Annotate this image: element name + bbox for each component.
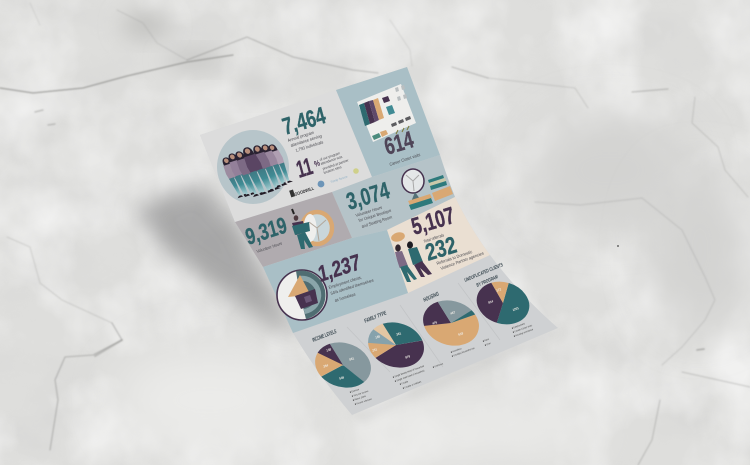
pie values: 618 [458,331,464,337]
pie [428,305,474,341]
text: employment clients: 54% identified themselves [330,277,374,296]
number: 9,319: 9,319 [243,213,290,250]
sheet base [200,67,558,415]
pie values: 185 [375,334,381,340]
pie values: 476 [432,320,438,326]
legend: ■ Above 100% [352,395,366,402]
legend [450,338,492,358]
pie values: 979 [405,354,411,360]
legend: ■ Very low income [351,390,369,398]
pie [371,326,421,364]
pie values: 814 [488,299,494,305]
panel: attendance [200,90,372,222]
legend [349,388,373,406]
chart title: BY PROGRAM [476,273,499,288]
partner logos [289,168,359,197]
text: employment clients [328,274,374,303]
text: annual attendance [287,129,324,153]
chart title: UNDUPLICATED CLIENTS [464,261,504,283]
icon: volunteer with clock ring [292,209,332,249]
pie values: 172 [496,287,502,293]
text: annual attendance: Annual program [287,129,315,143]
legend: ■ Couple [399,380,409,386]
legend: ■ Couple w/ children [402,380,422,390]
pie values: 861 [349,356,355,362]
legend: ■ Income unknown [354,397,373,406]
text: total referrals: Total referrals [423,232,445,244]
paper shadow [132,182,560,422]
text: employment clients: as homeless [334,291,356,303]
icon: house in circle [277,270,327,320]
number: 232: 232 [422,231,459,266]
chart: family type [364,310,444,390]
text: partner sites [319,151,350,175]
text: domestic violence referrals: Violence Partner agencies [440,250,484,271]
number: 11%: % [313,158,321,169]
text: partner sites: location sites [323,165,342,175]
chart title: FAMILY TYPE [364,310,388,325]
text: career closet visits: Career Closet visits [389,152,421,167]
chart: income levels [312,328,373,406]
pie values [323,347,355,381]
chart: housing [423,290,492,358]
text: annual attendance: 1,793 individuals [295,139,324,153]
panel: referrals [387,197,490,293]
pie values: 467 [450,310,456,316]
text: boutique hours: Volunteer Hours [355,205,383,218]
legend: ■ Unstably housed/at risk [451,346,476,358]
text: domestic violence referrals: Referrals to Domestic [436,249,473,266]
pie values: 1201 [512,306,520,312]
paper flyer [200,67,558,415]
text: partner sites: attendance was [320,155,343,166]
number: 7,464: 7,464 [280,102,329,140]
icon: clothing board [357,84,416,142]
pie [317,345,369,385]
pie values: 361 [396,331,402,337]
icon: two people with speech bubble [390,231,432,282]
legend: ■ Unknown [432,362,444,369]
number: 5,107: 5,107 [409,203,457,240]
text: boutique hours: and Seating Room [361,214,393,229]
pie values: 546 [339,375,345,381]
text: employment clients: Employment clients, [328,274,362,290]
panel: employment [263,230,408,333]
pie values [432,310,464,337]
text: annual attendance: attendance serving [290,133,323,148]
partner logos: GOODWILL [294,185,315,197]
legend [392,362,444,390]
number: 3,074: 3,074 [344,177,393,215]
number: 614: 614 [382,127,417,160]
legend: ■ Extreme [349,388,360,394]
text: boutique hours: for Unique Boutique [358,207,392,223]
legend: ■ Single male head of household [394,369,425,383]
panel: volunteer hours [235,192,352,267]
legend [511,322,534,338]
text: volunteer hours: Volunteer Hours [256,240,283,254]
icon: clock and books [402,169,453,210]
legend: ■ Rent [482,338,490,343]
number: 11%: 11 [294,153,316,184]
pie [478,284,528,322]
legend: ■ Career Closet visits [512,324,533,334]
pie values [488,287,520,312]
icon: group of women in circle [217,130,293,204]
legend: ■ Own [484,342,492,347]
text: boutique hours [355,205,393,229]
pie values: 251 [372,347,378,353]
chart: unduplicated clients by program [464,261,534,338]
legend: ■ Single female head of household [392,364,425,379]
legend: ■ Homeless [450,347,463,354]
pie values [372,331,411,360]
legend: ■ Employment [511,322,526,330]
pie values: 354 [323,363,329,369]
partner logos: Family Service [330,174,348,184]
panel: career closet [336,67,440,177]
pie values: 138 [326,347,332,353]
text: partner sites: provided at partner [322,158,350,171]
chart title: INCOME LEVELS [312,328,337,343]
panel: volunteer hours boutique [332,155,455,238]
legend: ■ Housing assistance [513,328,534,338]
number: 1,237: 1,237 [316,250,362,287]
chart title: HOUSING [423,290,440,304]
text: partner sites: of our program [319,151,341,162]
